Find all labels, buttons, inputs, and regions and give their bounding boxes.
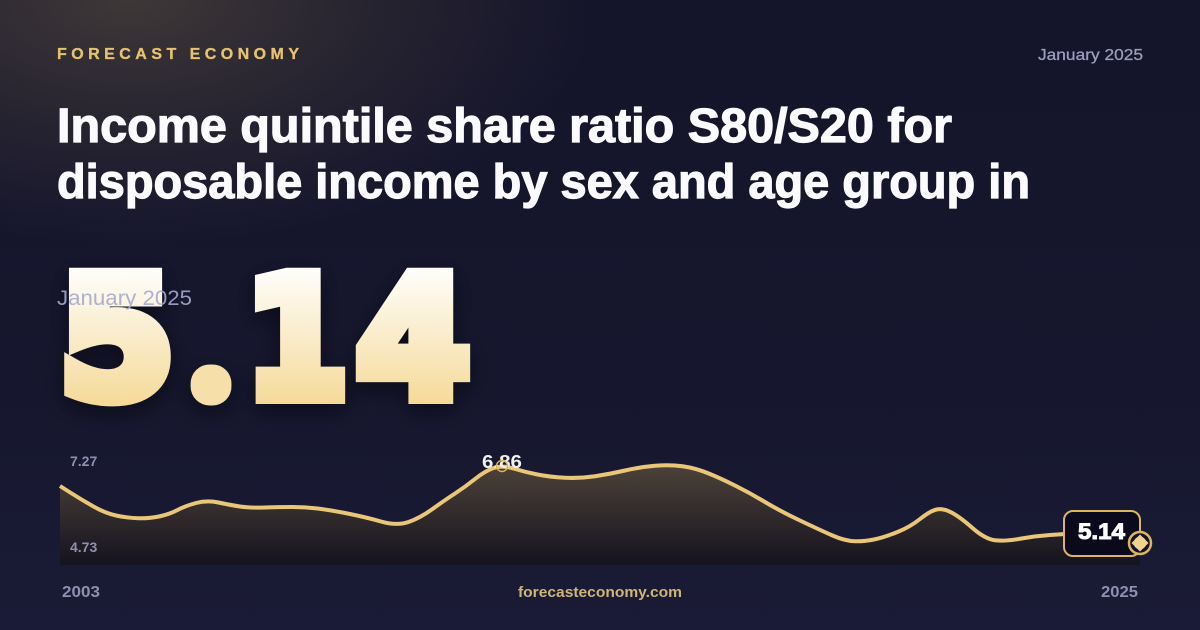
- brand label: FORECAST ECONOMY: [57, 46, 299, 63]
- big value: 4: [356, 243, 470, 435]
- date subtitle: January 2025: [57, 287, 192, 310]
- sparkline chart: [60, 452, 1151, 565]
- website: forecasteconomy.com: [518, 584, 682, 601]
- current value marker: [1129, 532, 1151, 554]
- current value callout: 5.14: [1078, 519, 1126, 544]
- big value: 5: [60, 243, 174, 435]
- big value: .: [208, 372, 214, 390]
- end year: 2025: [1101, 584, 1138, 601]
- current value callout: [1064, 511, 1140, 556]
- date top right: January 2025: [1038, 47, 1143, 64]
- start year: 2003: [62, 584, 100, 601]
- big value: 1: [246, 243, 348, 435]
- line: [60, 465, 1065, 541]
- area under line: [60, 465, 1140, 565]
- title: [57, 100, 1030, 209]
- axis min label: 4.73: [70, 539, 97, 555]
- peak label: 6.86: [482, 452, 522, 472]
- peak marker: [496, 460, 508, 472]
- title: Income quintile share ratio S80/S20 for: [57, 100, 952, 153]
- axis max label: 7.27: [70, 453, 97, 469]
- big value: [60, 243, 470, 435]
- title: disposable income by sex and age group in: [57, 156, 1030, 209]
